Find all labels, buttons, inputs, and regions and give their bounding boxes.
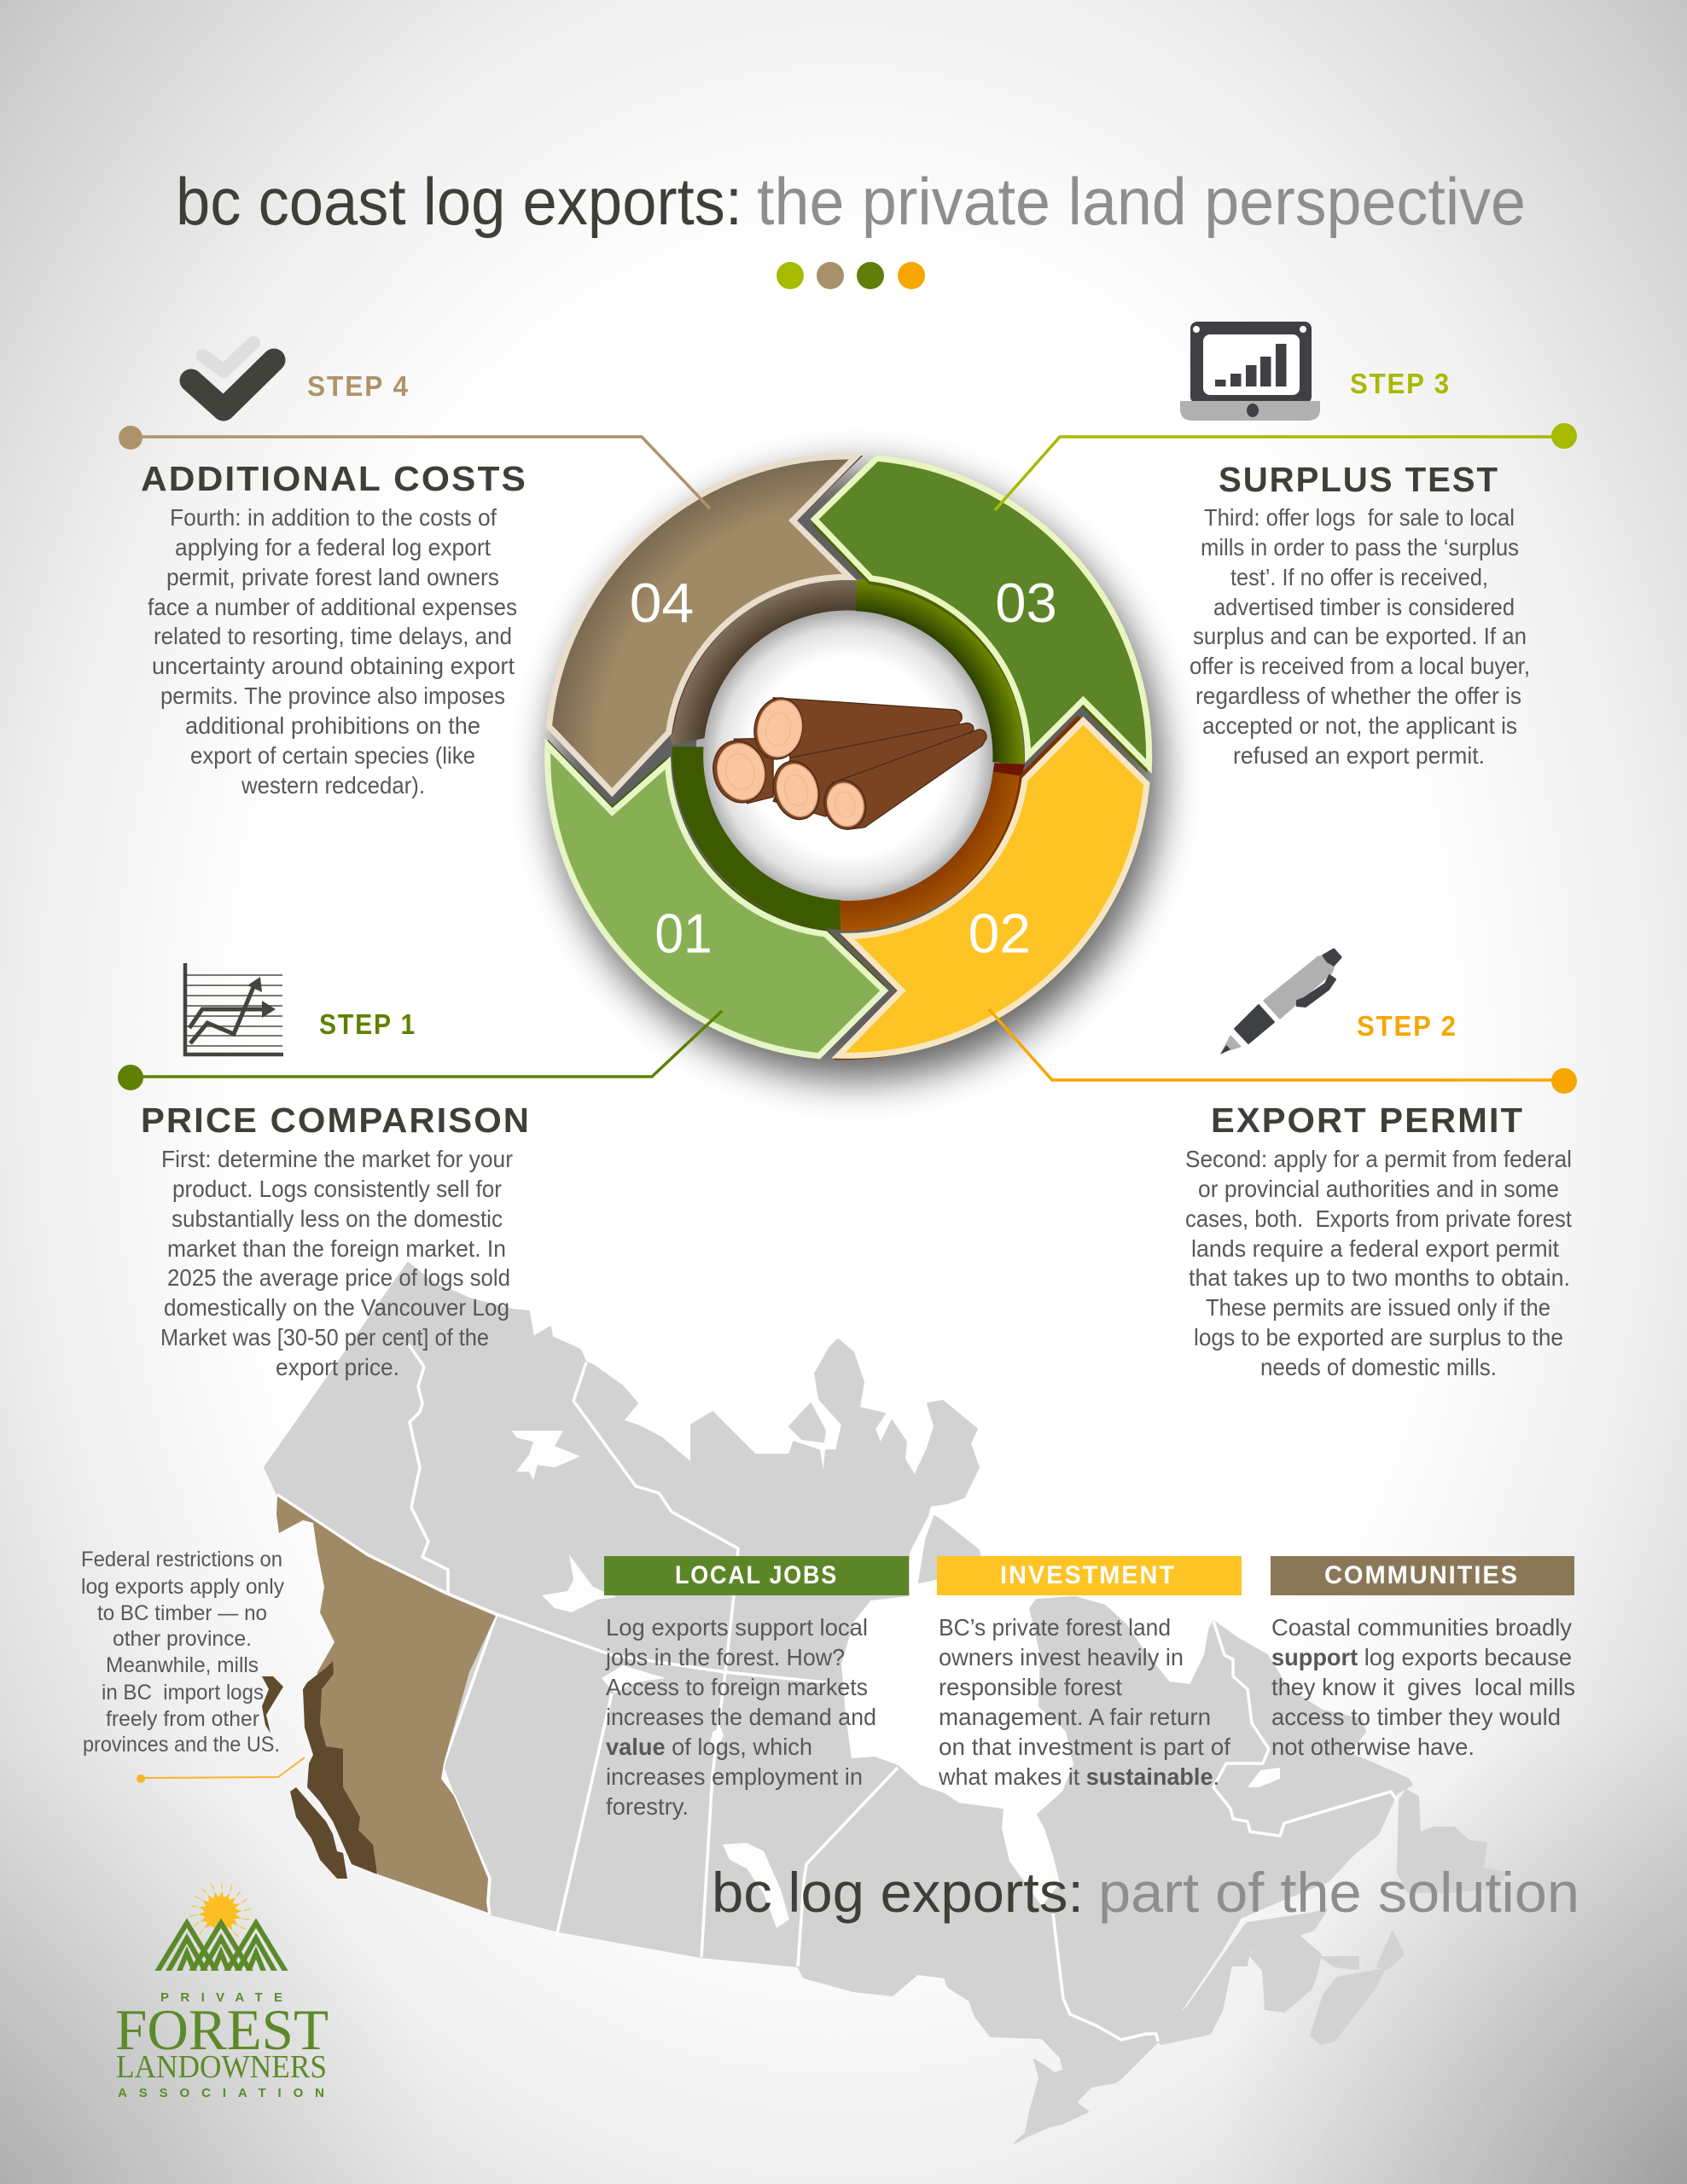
panel: step 1 price comparison [118, 963, 722, 1380]
step 4 label: STEP 4 [307, 370, 410, 402]
step 1 body text: substantially less on the domestic [172, 1205, 503, 1232]
panel: communities [1271, 1556, 1575, 1760]
communities text [1271, 1614, 1575, 1760]
icon: pen [1220, 950, 1341, 1054]
communities header [1271, 1556, 1574, 1595]
communities text: support log exports because [1271, 1644, 1572, 1670]
map: grey land mass [265, 1263, 1412, 2143]
cycle ring diagram [548, 456, 1161, 1079]
icon: check mark [191, 343, 274, 410]
local jobs text: Access to foreign markets [606, 1674, 868, 1700]
map: islands [789, 1403, 1506, 2044]
step 1 label: STEP 1 [319, 1008, 416, 1040]
step 4 body text: uncertainty around obtaining export [152, 653, 515, 679]
local jobs text: Log exports support local [606, 1614, 868, 1641]
step 2 body text: logs to be exported are surplus to the [1194, 1324, 1563, 1350]
local jobs text: jobs in the forest. How? [605, 1644, 845, 1670]
logo wordmark: LANDOWNERS [116, 2049, 327, 2085]
communities header: COMMUNITIES [1324, 1561, 1519, 1589]
inner wall: step 1 [672, 746, 841, 930]
icon: laptop with bar chart [1180, 322, 1320, 421]
note text: freely from other [106, 1707, 259, 1731]
investment text: on that investment is part of [939, 1734, 1230, 1760]
step 4 body text: permit, private forest land owners [166, 564, 499, 590]
panel: investment [937, 1556, 1242, 1790]
investment text: management. A fair return [939, 1704, 1211, 1730]
step 4 heading: ADDITIONAL COSTS [141, 459, 527, 498]
step 2 body text: that takes up to two months to obtain. [1189, 1264, 1570, 1291]
logo wordmark [115, 1990, 329, 2100]
step 1 body text: First: determine the market for your [161, 1146, 513, 1172]
step 3 leader line [995, 423, 1577, 510]
step 1 heading: PRICE COMPARISON [141, 1101, 531, 1140]
step 4 body text: permits. The province also imposes [160, 682, 505, 709]
step 2 label: STEP 2 [1357, 1010, 1457, 1042]
segment 1: price comparison: 01 [654, 903, 713, 965]
panel: local jobs [604, 1556, 909, 1820]
segment 2: export permit [834, 716, 1147, 1060]
logo mountains [154, 1923, 289, 1978]
investment header [937, 1556, 1242, 1595]
step 1 body text: product. Logs consistently sell for [172, 1176, 502, 1202]
ring drop shadow [551, 469, 1161, 1079]
segment 1: price comparison [548, 740, 884, 1056]
inner wall: step 4 [669, 579, 858, 745]
note text: to BC timber — no [97, 1601, 267, 1625]
note text: log exports apply only [81, 1575, 284, 1599]
inner wall: step 2 [840, 770, 1021, 931]
note text: other province. [113, 1627, 252, 1651]
icon: stack of logs [707, 694, 986, 834]
investment text: BC’s private forest land [939, 1614, 1171, 1641]
step 4 body text: face a number of additional expenses [148, 594, 517, 620]
segment 3: surplus test: 03 [995, 572, 1057, 634]
step 1 body text: Market was [30-50 per cent] of the [160, 1324, 489, 1350]
logo wordmark: FOREST [115, 1997, 329, 2062]
note text [81, 1548, 284, 1757]
investment text: owners invest heavily in [939, 1644, 1184, 1670]
local jobs header: LOCAL JOBS [675, 1561, 838, 1589]
local jobs text [605, 1614, 876, 1820]
step 2 body text: Second: apply for a permit from federal [1185, 1146, 1572, 1172]
step 1 body text: domestically on the Vancouver Log [164, 1294, 509, 1321]
segment 3: surplus test [813, 458, 1149, 773]
step 1 body text [160, 1146, 513, 1380]
note text: provinces and the US. [83, 1733, 280, 1757]
local jobs text: increases employment in [606, 1763, 863, 1790]
step 3 body text: advertised timber is considered [1213, 594, 1515, 620]
local jobs text: forestry. [606, 1793, 689, 1820]
step 4 body text: applying for a federal log export [175, 534, 491, 561]
step 2 body text: needs of domestic mills. [1260, 1354, 1497, 1380]
local jobs text: increases the demand and [606, 1704, 876, 1730]
segment 4: additional costs [549, 456, 863, 793]
step 3 body text: test’. If no offer is received, [1230, 564, 1488, 590]
step 2 heading: EXPORT PERMIT [1211, 1101, 1524, 1140]
panel: step 2 export permit [989, 950, 1577, 1380]
map: lakes [512, 1431, 1280, 1928]
title [176, 164, 1526, 239]
step 4 body text: Fourth: in addition to the costs of [170, 504, 497, 531]
logo: Private Forest Landowners Association [115, 1881, 329, 2100]
logo sun [189, 1881, 252, 1940]
step 4 body text: additional prohibitions on the [185, 712, 480, 739]
step 2 body text: cases, both. Exports from private forest [1185, 1205, 1572, 1232]
step 2 body text: or provincial authorities and in some [1198, 1176, 1559, 1202]
step 2 body text: These permits are issued only if the [1206, 1294, 1550, 1321]
closing headline: part of the solution [1098, 1861, 1579, 1924]
step 3 body text: regardless of whether the offer is [1195, 682, 1521, 709]
step 4 leader line [119, 426, 710, 508]
step 1 body text: market than the foreign market. In [167, 1235, 506, 1262]
communities text: they know it gives local mills [1271, 1674, 1575, 1700]
local jobs text: value of logs, which [606, 1734, 812, 1760]
local jobs header [604, 1556, 909, 1595]
closing headline [712, 1861, 1579, 1924]
step 3 label: STEP 3 [1350, 368, 1451, 399]
note text: in BC import logs [102, 1681, 264, 1705]
closing headline: bc log exports: [712, 1861, 1084, 1924]
step 1 body text: 2025 the average price of logs sold [167, 1264, 510, 1291]
logo wordmark: ASSOCIATION [118, 2086, 324, 2100]
segment 4: additional costs: 04 [630, 572, 694, 634]
communities text: not otherwise have. [1271, 1734, 1475, 1760]
step 3 body text: surplus and can be exported. If an [1193, 623, 1527, 649]
icon: line chart with arrows [185, 963, 283, 1054]
step 3 body text [1190, 504, 1530, 769]
map of Canada [262, 1263, 1506, 2143]
title: bc coast log exports: [176, 164, 742, 239]
step 1 body text: export price. [276, 1354, 399, 1380]
step 2 body text [1185, 1146, 1572, 1380]
investment header: INVESTMENT [1000, 1561, 1176, 1589]
investment text: what makes it sustainable. [938, 1763, 1219, 1790]
note text: Meanwhile, mills [106, 1653, 259, 1677]
step 2 body text: lands require a federal export permit [1191, 1235, 1559, 1262]
step 4 body text: western redcedar). [241, 772, 425, 799]
step 3 body text: mills in order to pass the ‘surplus [1201, 534, 1519, 561]
inner wall: step 3 [856, 579, 1024, 764]
step 4 body text: export of certain species (like [190, 742, 475, 769]
communities text: Coastal communities broadly [1271, 1614, 1572, 1641]
step 3 body text: offer is received from a local buyer, [1190, 653, 1530, 679]
map: provincial borders [277, 1344, 1397, 2042]
map: BC coastal forest region [262, 1661, 377, 1879]
step 3 heading: SURPLUS TEST [1219, 460, 1499, 499]
panel: federal restrictions note [81, 1548, 305, 1783]
note text: Federal restrictions on [81, 1548, 282, 1571]
step 3 body text: refused an export permit. [1233, 742, 1485, 769]
note leader line [137, 1757, 305, 1783]
centre hole [695, 605, 1000, 909]
step 3 body text: Third: offer logs for sale to local [1204, 504, 1515, 531]
title accent dots [777, 262, 925, 289]
communities text: access to timber they would [1271, 1704, 1561, 1730]
step 3 body text: accepted or not, the applicant is [1202, 712, 1517, 739]
step 4 body text [148, 504, 517, 799]
map: British Columbia [276, 1496, 496, 1913]
panel: step 3 surplus test [995, 322, 1577, 769]
logo wordmark: PRIVATE [160, 1990, 282, 2005]
title: the private land perspective [757, 164, 1526, 239]
step 1 leader line [118, 1011, 722, 1090]
investment text: responsible forest [939, 1674, 1122, 1700]
investment text [938, 1614, 1230, 1790]
segment 2: export permit: 02 [969, 903, 1031, 965]
step 4 body text: related to resorting, time delays, and [154, 623, 512, 649]
step 2 leader line [989, 1009, 1577, 1094]
panel: step 4 additional costs [119, 343, 710, 799]
